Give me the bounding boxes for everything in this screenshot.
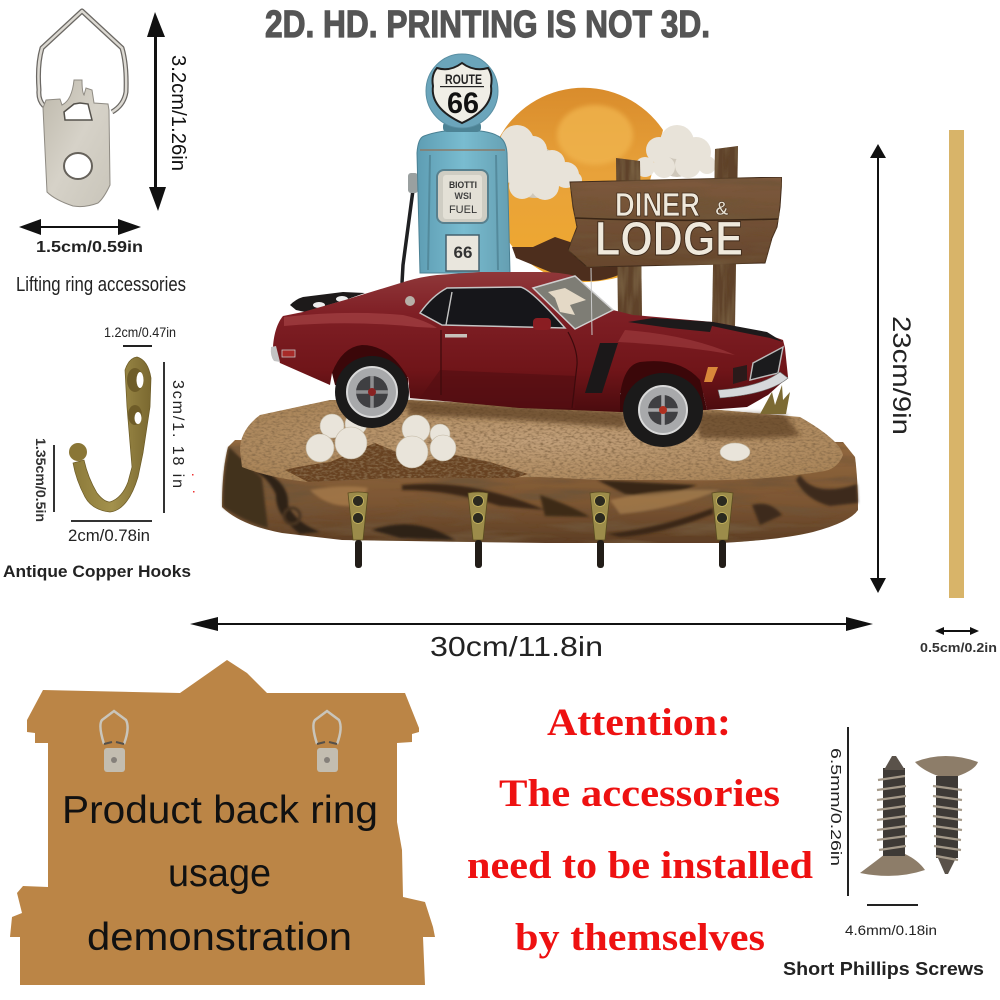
shadow under car xyxy=(405,400,800,439)
sun disc xyxy=(498,88,663,282)
board text line 2: usage xyxy=(168,852,271,895)
sign board xyxy=(568,177,782,267)
label: ring height: 3.2cm/1.26in xyxy=(167,55,189,171)
arrow: ring height xyxy=(147,12,166,211)
sand top xyxy=(240,400,843,482)
arrow: product height xyxy=(870,144,886,593)
label: product height: 23cm/9in xyxy=(887,316,915,435)
antenna xyxy=(591,268,592,335)
board silhouette xyxy=(10,660,435,985)
spoiler xyxy=(290,292,365,312)
attention line 1: The accessories xyxy=(499,772,780,815)
fuel hose xyxy=(402,173,418,283)
hook 1 xyxy=(348,492,368,568)
turn signal xyxy=(704,367,718,382)
door seam xyxy=(441,330,577,408)
label: hook height: 3cm/1. 18 in xyxy=(169,380,186,488)
front bumper xyxy=(718,372,788,398)
label: screw width: 4.6mm/0.18in xyxy=(845,922,937,938)
wooden stick thickness sample xyxy=(949,130,964,598)
windshield xyxy=(533,276,613,329)
pump window text: fuel: FUEL xyxy=(449,204,477,216)
side mirror xyxy=(533,318,551,330)
grille xyxy=(750,347,783,380)
label: short phillips screws: Short Phillips Screws xyxy=(783,959,984,979)
hood highlight xyxy=(618,330,735,355)
icon: brass hook xyxy=(69,357,151,512)
left cloud xyxy=(494,125,582,200)
panel: lifting ring accessory xyxy=(16,11,189,296)
attention heading: Attention: xyxy=(547,701,731,744)
front wheel xyxy=(623,373,703,447)
hook 4 xyxy=(712,492,733,568)
car xyxy=(271,268,788,447)
dimension line: hook width xyxy=(71,520,152,522)
label: hook top width: 1.2cm/0.47in xyxy=(104,324,176,340)
tail light xyxy=(282,350,295,357)
pump lower panel text: 66 xyxy=(454,243,472,262)
fuel pump xyxy=(417,130,510,273)
arrow: product width xyxy=(190,617,873,631)
label: ring width: 1.5cm/0.59in xyxy=(36,239,143,256)
headlight recess xyxy=(733,365,747,384)
attention line 3: by themselves xyxy=(515,916,765,959)
label: lifting ring accessories: Lifting ring accessories xyxy=(16,274,186,296)
rear fender highlight xyxy=(284,313,437,328)
attention notice xyxy=(467,701,813,959)
globe text: 66: 66 xyxy=(447,87,479,120)
dimension line: hook height xyxy=(163,362,165,513)
label: antique copper hooks: Antique Copper Hooks xyxy=(3,562,191,581)
title: 2D. HD. PRINTING IS NOT 3D. xyxy=(265,4,710,46)
cab interior seen through windshield xyxy=(548,288,586,315)
globe text: route: ROUTE xyxy=(445,71,482,87)
fender stripe xyxy=(585,343,618,393)
fuel cap xyxy=(405,296,415,306)
door handle xyxy=(445,334,467,338)
rear bumper xyxy=(271,346,280,362)
pump window text line 2: WSI xyxy=(454,191,472,201)
board text line 3: demonstration xyxy=(87,916,352,959)
hood stripe xyxy=(628,318,783,342)
hook 2 xyxy=(468,492,488,568)
sign posts xyxy=(616,146,738,326)
sign text: ampersand: & xyxy=(715,199,729,220)
hook 3 xyxy=(590,492,610,568)
stray red dots xyxy=(192,474,194,492)
arrow: thickness xyxy=(935,627,979,635)
dark grass patch xyxy=(285,443,528,482)
pump globe xyxy=(426,54,498,132)
sign text: diner: DINER xyxy=(615,186,700,223)
dimension line: screw width xyxy=(867,904,918,906)
dimension line: screw height xyxy=(847,727,849,896)
label: hook depth: 1.35cm/0.5in xyxy=(33,438,49,522)
sign plank seam xyxy=(575,218,778,220)
pump window text: BIOTTI xyxy=(449,180,477,190)
clouds xyxy=(494,125,716,200)
icon: screw pointing down xyxy=(915,756,978,874)
board text line 1: Product back ring xyxy=(62,789,378,832)
wheel arch shade xyxy=(332,345,707,412)
wooden base xyxy=(222,440,858,543)
rear wheel xyxy=(335,356,409,428)
product: diner and lodge scene xyxy=(222,54,858,568)
lower door shade xyxy=(420,370,575,408)
window pillar xyxy=(446,292,452,325)
ring: left xyxy=(100,711,128,772)
label: thickness: 0.5cm/0.2in xyxy=(920,640,997,655)
spoiler holes xyxy=(313,296,348,308)
car body xyxy=(273,272,788,412)
icon: screw pointing up xyxy=(860,756,925,876)
right cloud xyxy=(635,125,716,178)
arrow: ring width xyxy=(19,219,141,235)
key hooks xyxy=(348,492,733,568)
label: product width: 30cm/11.8in xyxy=(430,631,603,662)
dimension line: hook top width xyxy=(123,345,152,347)
panel: short phillips screws xyxy=(783,727,984,979)
desert shrub xyxy=(760,385,790,414)
icon: D-ring hanger xyxy=(38,11,126,207)
panel: antique copper hook xyxy=(3,324,194,581)
sign text: lodge: LODGE xyxy=(595,213,743,266)
label: hook width: 2cm/0.78in xyxy=(68,526,150,545)
side window xyxy=(420,287,565,328)
attention line 2: need to be installed xyxy=(467,844,813,887)
rocks xyxy=(306,413,750,468)
label: screw height: 6.5mm/0.26in xyxy=(827,748,844,866)
panel: product back usage demonstration xyxy=(10,660,435,985)
dimension line: hook depth xyxy=(53,445,55,512)
ring: right xyxy=(313,711,341,772)
